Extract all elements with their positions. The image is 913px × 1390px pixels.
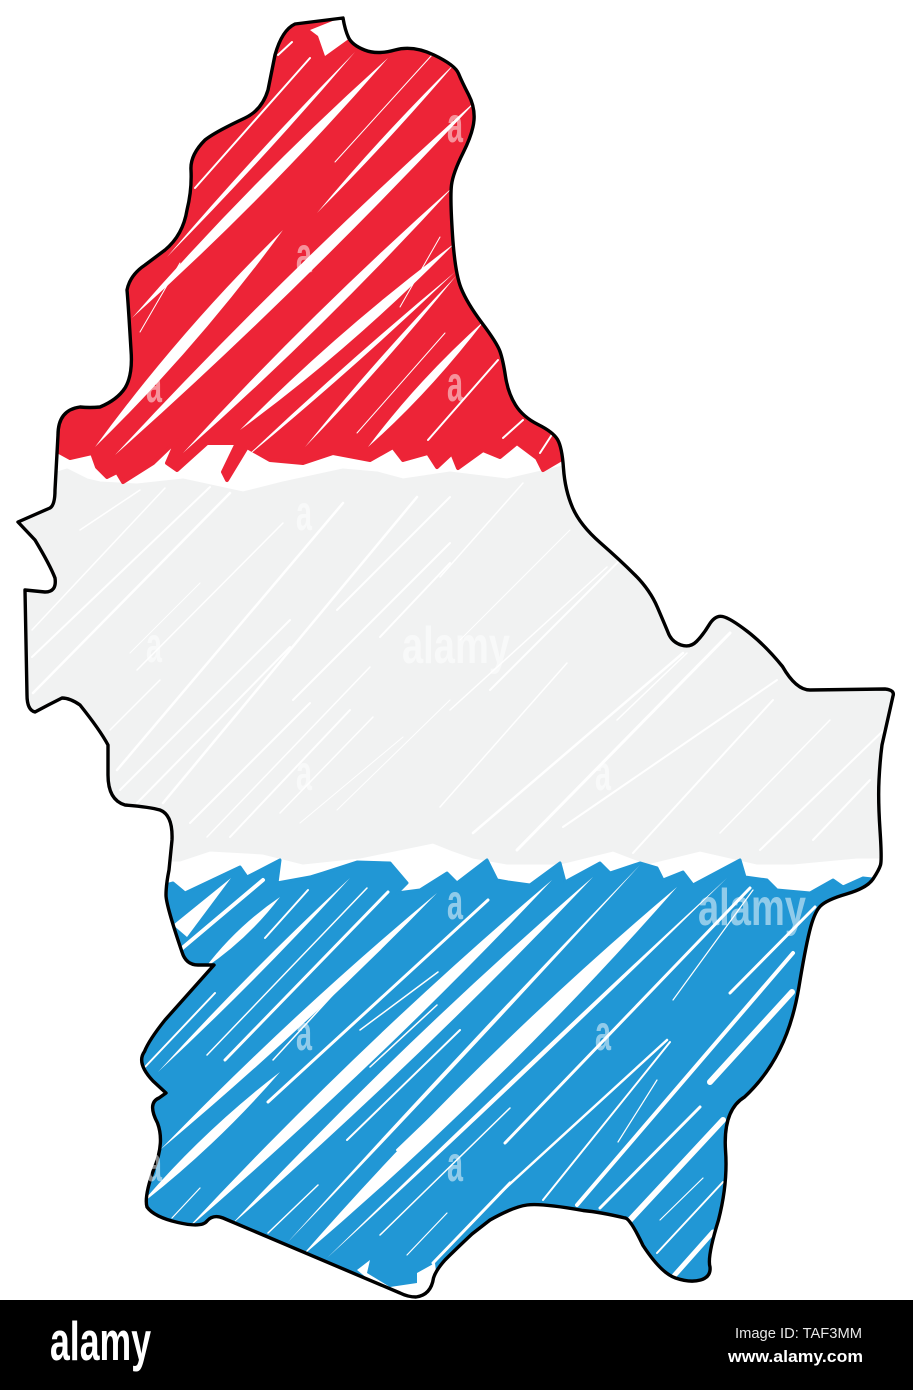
watermarks: a: [296, 745, 313, 801]
website: www.alamy.com: [727, 1347, 863, 1366]
watermarks: a: [447, 97, 464, 153]
white hatch over red: [95, 16, 485, 460]
footer band: [0, 1300, 913, 1390]
image id: Image ID: TAF3MM: [735, 1325, 862, 1342]
white stripe of scribbled flag: [0, 467, 900, 863]
blue stripe of scribbled flag: [130, 860, 900, 1305]
watermarks: a: [595, 745, 612, 801]
watermarks: a: [296, 227, 313, 283]
red stripe of scribbled flag: [50, 0, 570, 482]
watermarks: a: [447, 356, 464, 412]
watermarks: alamy: [402, 617, 510, 675]
watermarks: a: [447, 1136, 464, 1192]
watermarks: a: [296, 1005, 313, 1061]
watermarks: a: [146, 357, 163, 413]
watermarks: alamy: [698, 879, 806, 937]
watermarks: a: [146, 1136, 163, 1192]
watermarks: [146, 97, 806, 1192]
watermarks: a: [595, 1005, 612, 1061]
watermarks: a: [146, 617, 163, 673]
watermarks: a: [296, 485, 313, 541]
white hatch over blue: [140, 865, 727, 1305]
footer logo: alamy: [50, 1310, 151, 1372]
watermarks: a: [447, 874, 464, 930]
